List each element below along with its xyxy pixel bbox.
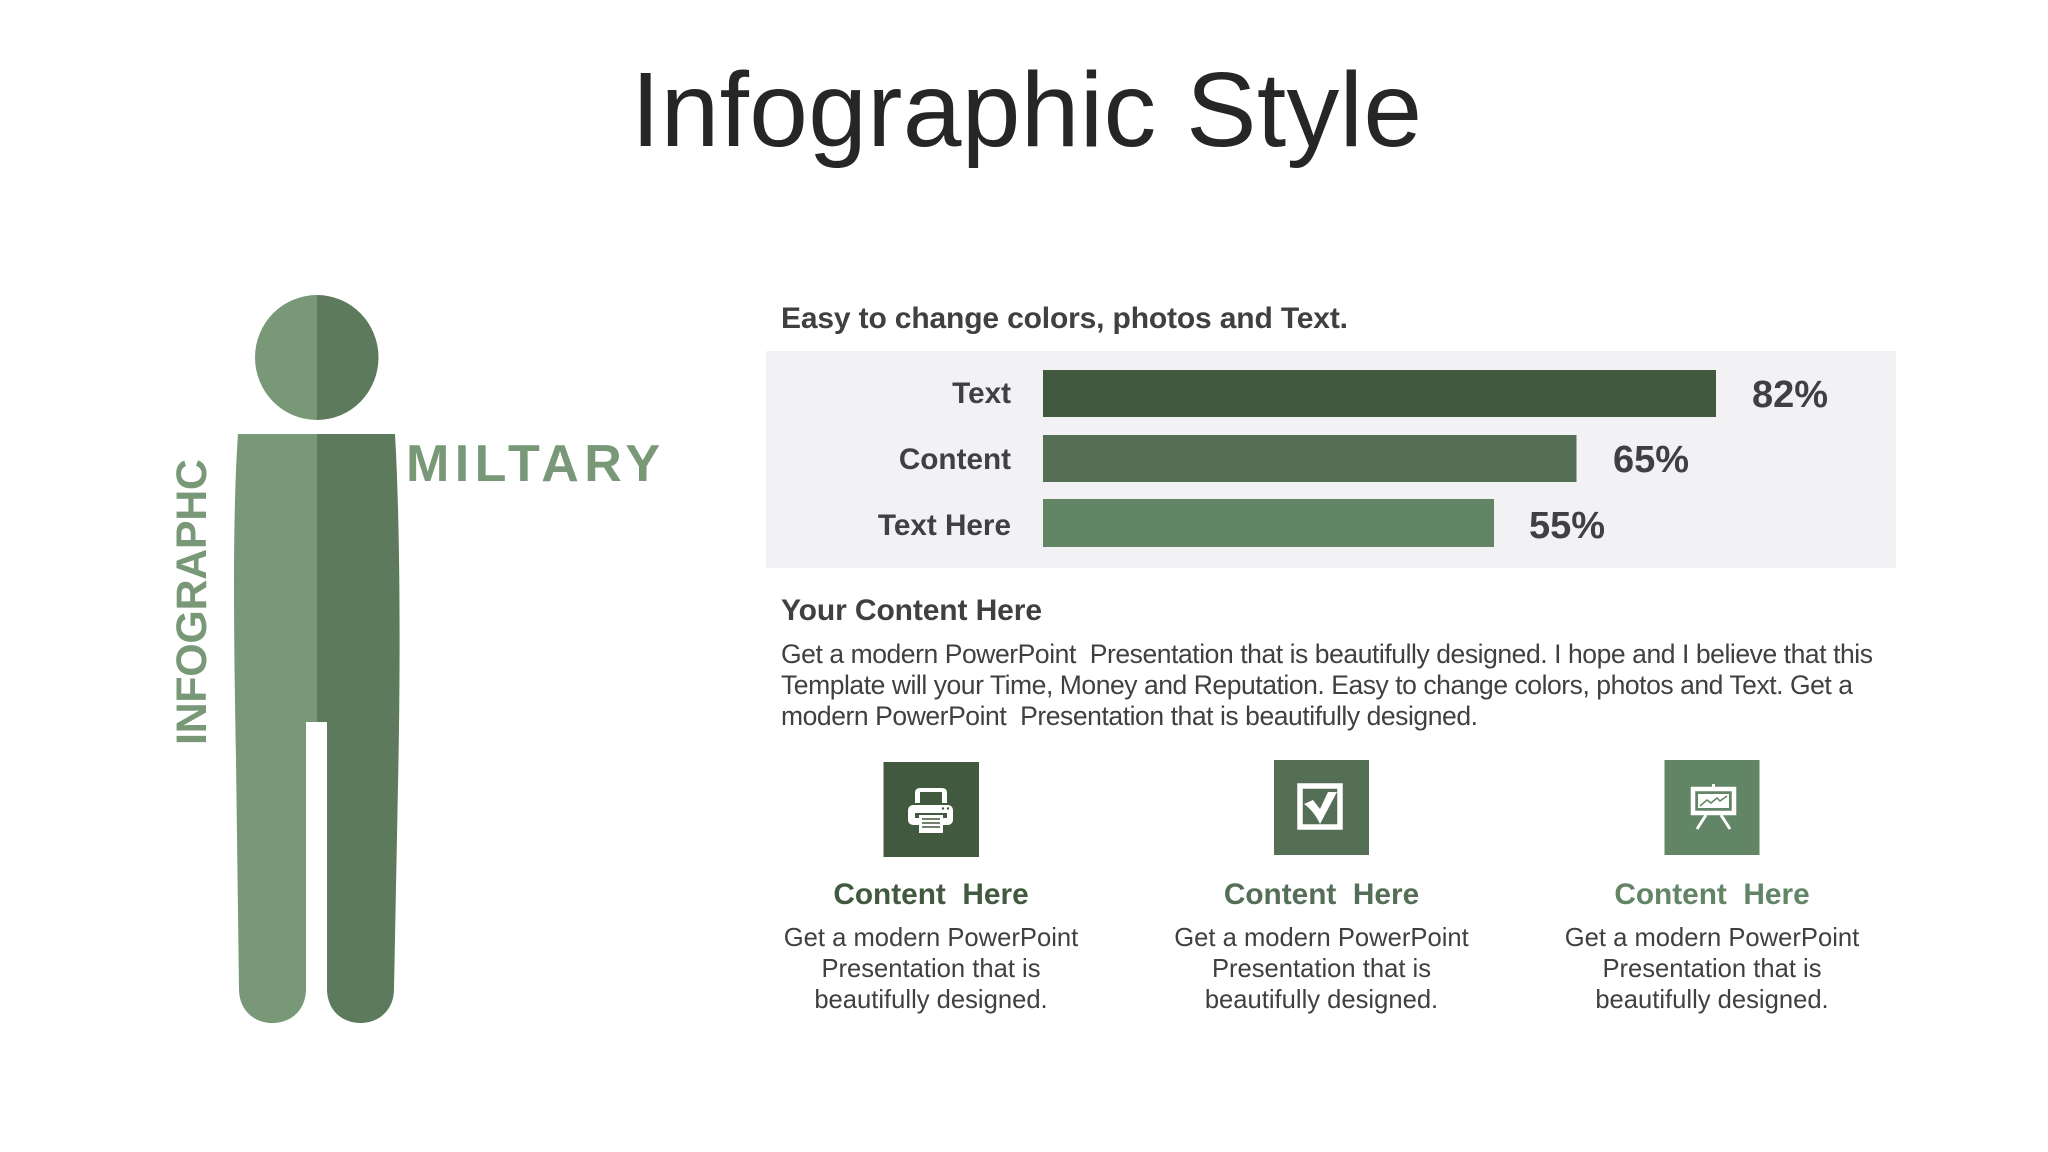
heading: your content here: Your Content Here: [781, 594, 1042, 627]
caption: [1565, 924, 1859, 1014]
paragraph: modern PowerPoint Presentation that is beautifully designed.: [781, 701, 1478, 731]
paragraph: Template will your Time, Money and Reputation. Easy to change colors, photos and Text. Get a: [781, 670, 1853, 700]
icon: printer: [884, 762, 979, 857]
icon: presentation board: [1664, 760, 1760, 855]
figure head: [255, 295, 378, 420]
heading: Content Here: [833, 878, 1029, 911]
caption: [784, 924, 1078, 1014]
panel background: [766, 351, 1896, 568]
bar row: Text 82%: Text: [952, 377, 1011, 410]
panel: bar chart: [766, 351, 1896, 568]
column 3: [1565, 760, 1859, 1014]
bar row: Text 82%: 82%: [1752, 374, 1828, 416]
caption: beautifully designed.: [814, 986, 1048, 1014]
bar row: Text Here 55%: Text Here: [878, 509, 1011, 542]
figure: person icon: [234, 295, 400, 1023]
icon: checkbox: [1274, 760, 1369, 855]
caption: Get a modern PowerPoint: [1174, 924, 1469, 952]
caption: beautifully designed.: [1595, 986, 1829, 1014]
paragraph: Get a modern PowerPoint Presentation that is beautifully designed. I hope and I believe that this: [781, 639, 1873, 669]
heading: Content Here: [1614, 878, 1810, 911]
figure body right half: [317, 434, 400, 1023]
label: INFOGRAPHC: INFOGRAPHC: [168, 459, 216, 745]
column 2: [1174, 760, 1469, 1014]
caption: Get a modern PowerPoint: [784, 924, 1078, 952]
bar row: Text Here 55%: 55%: [1529, 505, 1605, 547]
caption: Presentation that is: [821, 955, 1041, 983]
caption: [1174, 924, 1469, 1014]
caption: Get a modern PowerPoint: [1565, 924, 1859, 952]
bar row: Content 65%: [899, 435, 1689, 482]
paragraph: [781, 639, 1873, 731]
caption: beautifully designed.: [1205, 986, 1438, 1014]
bar row: Text Here 55%: [878, 499, 1605, 547]
heading: Content Here: [1224, 878, 1419, 911]
label: MILTARY: MILTARY: [406, 435, 660, 493]
title: Infographic Style: [631, 51, 1422, 169]
caption: Presentation that is: [1602, 955, 1822, 983]
bar row: Content 65%: 65%: [1613, 439, 1689, 481]
caption: Presentation that is: [1212, 955, 1431, 983]
heading: easy to change: Easy to change colors, photos and Text.: [781, 302, 1348, 335]
column 1: [784, 762, 1078, 1014]
bar row: Content 65%: Content: [899, 443, 1011, 476]
bar row: Text 82%: [952, 370, 1828, 417]
figure body left half: [234, 434, 317, 1023]
